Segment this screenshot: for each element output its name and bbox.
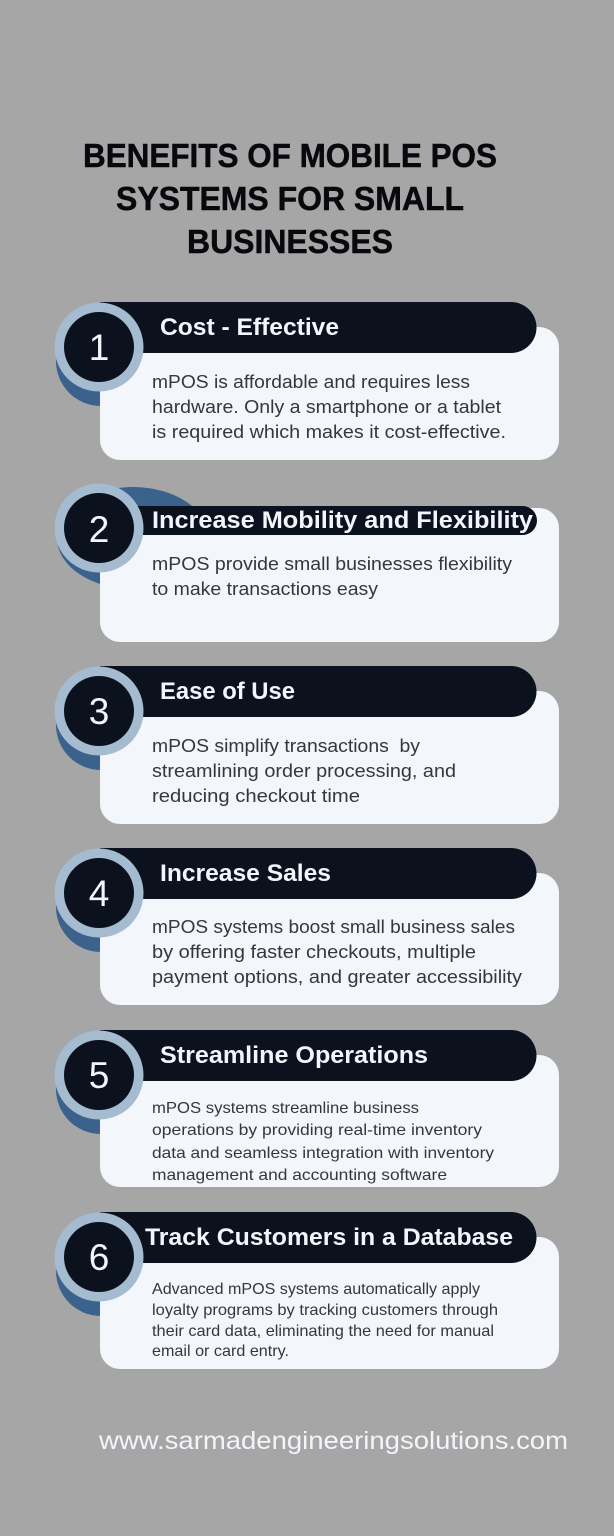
body 1 xyxy=(152,371,506,442)
body 2 xyxy=(152,553,513,599)
badge 5 xyxy=(54,1030,144,1120)
title: BENEFITS OF MOBILE POS xyxy=(83,138,497,175)
body 5: management and accounting software xyxy=(152,1167,447,1184)
body 2: to make transactions easy xyxy=(152,578,379,599)
header bar 1 xyxy=(100,302,537,353)
heading 5: Streamline Operations xyxy=(160,1042,428,1069)
body 3 xyxy=(152,735,456,806)
body 6: loyalty programs by tracking customers through xyxy=(152,1302,498,1319)
panel: ease of use xyxy=(54,666,559,824)
body 2: mPOS provide small businesses flexibility xyxy=(152,553,513,574)
badge shadow 2 xyxy=(57,487,209,589)
badge 6 xyxy=(54,1212,144,1302)
badge 1: 1 xyxy=(89,327,109,368)
header bar 3 xyxy=(100,666,537,717)
panel: streamline operations xyxy=(54,1030,559,1187)
header bar 2 xyxy=(100,506,537,535)
badge 2: 2 xyxy=(89,509,109,550)
title: BUSINESSES xyxy=(187,224,393,261)
body 1: hardware. Only a smartphone or a tablet xyxy=(152,396,501,417)
badge 1 xyxy=(54,302,144,392)
body 3: streamlining order processing, and xyxy=(152,760,456,781)
heading 6: Track Customers in a Database xyxy=(145,1224,513,1251)
body 6 xyxy=(152,1281,498,1360)
badge shadow 4 xyxy=(56,862,146,952)
body 4: payment options, and greater accessibility xyxy=(152,966,523,987)
badge shadow 5 xyxy=(56,1044,146,1134)
badge shadow 3 xyxy=(56,680,146,770)
body 5 xyxy=(152,1100,494,1184)
panel: cost effective xyxy=(54,302,559,460)
body 1: mPOS is affordable and requires less xyxy=(152,371,470,392)
panel: track customers xyxy=(54,1212,559,1369)
header bar 4 xyxy=(100,848,537,899)
header bar 5 xyxy=(100,1030,537,1081)
body 4 xyxy=(152,916,523,987)
heading 4: Increase Sales xyxy=(160,860,331,887)
heading 1: Cost - Effective xyxy=(160,314,339,341)
card 2 xyxy=(100,508,559,642)
card 3 xyxy=(100,691,559,824)
badge shadow 6 xyxy=(56,1226,146,1316)
body 4: by offering faster checkouts, multiple xyxy=(152,941,476,962)
card 1 xyxy=(100,327,559,460)
badge 5: 5 xyxy=(89,1055,109,1096)
body 3: reducing checkout time xyxy=(152,785,360,806)
card 5 xyxy=(100,1055,559,1187)
badge 4: 4 xyxy=(89,873,109,914)
body 5: mPOS systems streamline business xyxy=(152,1100,419,1117)
title: SYSTEMS FOR SMALL xyxy=(116,181,464,218)
body 4: mPOS systems boost small business sales xyxy=(152,916,515,937)
website url: www.sarmadengineeringsolutions.com xyxy=(98,1427,568,1455)
heading 3: Ease of Use xyxy=(160,678,295,705)
card 4 xyxy=(100,873,559,1005)
panel: mobility and flexibility xyxy=(54,484,559,642)
body 6: email or card entry. xyxy=(152,1343,289,1360)
badge 6: 6 xyxy=(89,1237,109,1278)
badge shadow 1 xyxy=(56,316,146,406)
card 6 xyxy=(100,1237,559,1369)
body 6: Advanced mPOS systems automatically apply xyxy=(152,1281,480,1298)
body 5: operations by providing real-time inventory xyxy=(152,1122,482,1139)
badge 3 xyxy=(54,666,144,756)
body 6: their card data, eliminating the need for manual xyxy=(152,1323,494,1340)
badge 2 xyxy=(54,484,144,572)
body 3: mPOS simplify transactions by xyxy=(152,735,421,756)
heading 2: Increase Mobility and Flexibility xyxy=(152,507,534,534)
body 5: data and seamless integration with inventory xyxy=(152,1145,494,1162)
badge 4 xyxy=(54,848,144,938)
title xyxy=(83,138,497,261)
header bar 6 xyxy=(100,1212,537,1263)
body 1: is required which makes it cost-effective. xyxy=(152,421,506,442)
panel: increase sales xyxy=(54,848,559,1005)
badge 3: 3 xyxy=(89,691,109,732)
